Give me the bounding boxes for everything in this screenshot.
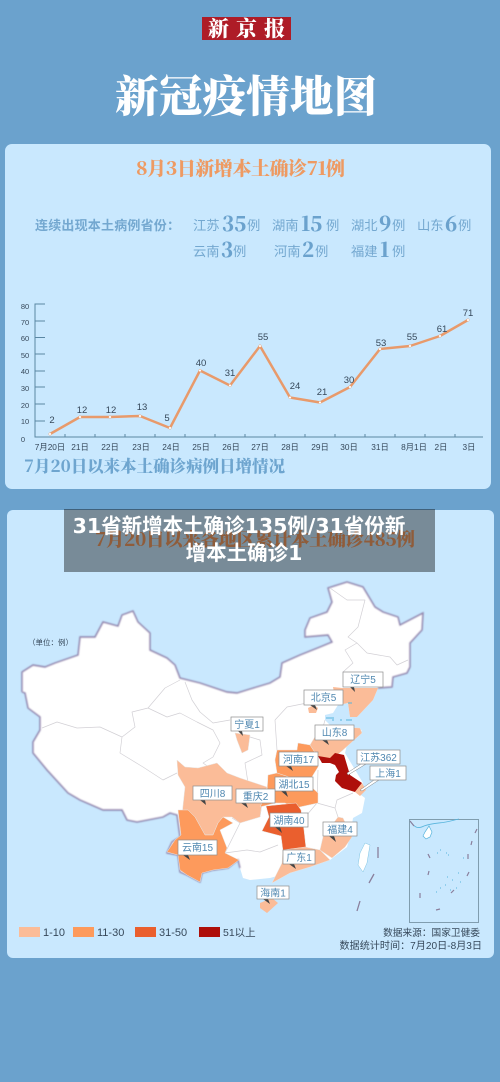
line chart: 26日	[222, 442, 240, 452]
line chart: 50	[21, 351, 29, 360]
province labels: 福建4	[327, 823, 353, 836]
line chart: 40	[196, 358, 206, 369]
logo: 新京报: 新京报	[208, 13, 285, 43]
province: Sichuan	[177, 760, 267, 835]
line chart: 12	[106, 405, 116, 416]
province summary list: 河南	[274, 244, 301, 259]
line chart: 8月1日	[401, 442, 427, 452]
line chart: 10	[21, 417, 29, 426]
province summary list: 例	[458, 218, 471, 233]
title: 新冠疫情地图	[115, 63, 377, 125]
line chart: 21	[317, 387, 327, 398]
province labels: 云南15	[182, 841, 213, 854]
province: Shanghai	[355, 783, 366, 796]
sea dashes	[357, 847, 378, 911]
line chart: 3日	[463, 442, 475, 452]
line chart: 21日	[71, 442, 89, 452]
legend: 51以上	[223, 927, 256, 939]
line chart: 61	[437, 324, 447, 335]
province summary list	[35, 208, 471, 263]
province: Fujian and Guangdong	[320, 817, 352, 858]
province summary list: 湖北	[351, 218, 378, 233]
line chart: 20	[21, 401, 29, 410]
line chart: 31	[225, 368, 235, 379]
line chart: 24	[290, 381, 300, 392]
line chart: 2日	[435, 442, 447, 452]
line chart: 60	[21, 334, 29, 343]
panel: map	[7, 510, 494, 958]
unit note: （单位：例）	[28, 637, 73, 647]
province summary list: 例	[392, 244, 405, 259]
province labels: 广东1	[286, 851, 312, 864]
province summary list: 1	[380, 234, 389, 263]
province summary list: 例	[392, 218, 405, 233]
province: Liaoning	[333, 687, 378, 717]
province: Ningxia	[235, 733, 250, 753]
province: Beijing	[308, 705, 318, 713]
province: Shandong	[310, 726, 362, 760]
province: Hubei	[260, 773, 318, 808]
province labels: 四川8	[200, 789, 226, 800]
province labels: 山东8	[322, 726, 348, 739]
line chart: 53	[376, 338, 386, 349]
province labels: 河南17	[283, 753, 314, 766]
province summary list: 9	[379, 208, 391, 237]
panel heading: 8月3日新增本土确诊71例	[136, 154, 345, 181]
caption overlay: 31省新增本土确诊135例/31省份新	[73, 514, 405, 538]
line chart: 28日	[281, 442, 299, 452]
province summary list: 福建	[351, 244, 378, 259]
province: Hainan	[260, 898, 278, 913]
province summary list: 例	[233, 244, 246, 259]
line chart: 71	[463, 308, 473, 319]
china map	[22, 582, 423, 913]
legend: 31-50	[159, 927, 187, 939]
province labels: 湖北15	[278, 779, 310, 791]
province summary list: 连续出现本土病例省份：	[35, 218, 180, 233]
line chart: 24日	[162, 442, 180, 452]
inset: South China Sea	[410, 819, 478, 922]
line chart: 2	[49, 415, 55, 426]
line chart: 13	[137, 402, 147, 413]
line chart: 30日	[340, 442, 358, 452]
province summary list: 6	[445, 208, 457, 237]
province summary list: 例	[315, 244, 328, 259]
line chart: 40	[21, 367, 29, 376]
province summary list: 山东	[417, 218, 444, 233]
legend: 11-30	[97, 927, 124, 939]
province labels: 辽宁5	[350, 673, 376, 686]
chart caption: 7月20日以来本土确诊病例日增情况	[24, 453, 286, 477]
province summary list: 2	[302, 234, 314, 263]
line chart	[21, 302, 483, 452]
province: Jiangsu	[318, 753, 362, 792]
line chart: 30	[21, 384, 29, 393]
line chart: 23日	[132, 442, 150, 452]
province: Yunnan	[167, 810, 239, 882]
province labels	[178, 672, 406, 904]
province summary list: 云南	[193, 244, 220, 259]
province labels: 江苏362	[360, 751, 397, 764]
legend	[19, 927, 256, 939]
line chart: 70	[21, 318, 29, 327]
line chart: 55	[407, 332, 417, 343]
line chart: 25日	[192, 442, 210, 452]
province: Hunan	[262, 803, 306, 851]
line chart: 12	[77, 405, 87, 416]
province summary list: 3	[221, 234, 233, 263]
caption overlay: 增本土确诊1	[186, 541, 302, 565]
province labels: 北京5	[311, 691, 337, 704]
province labels: 湖南40	[273, 814, 305, 827]
map subtitle: 7月20日以来各地区累计本土确诊485例	[95, 526, 415, 552]
line chart: 7月20日	[35, 442, 65, 452]
data source note: 数据统计时间：7月20日-8月3日	[340, 939, 482, 952]
line chart: 5	[164, 413, 170, 424]
data source note	[340, 926, 482, 952]
data source note: 数据来源：国家卫健委	[383, 926, 480, 939]
province summary list: 例	[247, 218, 260, 233]
province summary list: 15	[301, 208, 323, 237]
province labels: 宁夏1	[234, 718, 260, 731]
line chart: 55	[258, 332, 268, 343]
line chart: 31日	[371, 442, 389, 452]
province summary list: 江苏	[193, 218, 220, 233]
line chart: 30	[344, 375, 354, 386]
line chart: 27日	[251, 442, 269, 452]
line chart: 80	[21, 302, 29, 311]
province labels: 重庆2	[243, 790, 269, 803]
caption overlay	[64, 509, 435, 572]
line chart: 0	[21, 435, 25, 444]
province: Henan	[275, 743, 318, 783]
line chart: 22日	[101, 442, 119, 452]
province summary list: 35	[222, 208, 246, 237]
province labels: 上海1	[375, 767, 401, 780]
province summary list: 例	[326, 218, 339, 233]
province summary list: 湖南	[272, 218, 299, 233]
panel: daily new cases	[5, 144, 491, 489]
island: Taiwan	[358, 843, 370, 872]
province borders	[42, 588, 408, 853]
province labels: 海南1	[260, 886, 286, 900]
line chart: 29日	[311, 442, 329, 452]
legend: 1-10	[43, 927, 65, 939]
